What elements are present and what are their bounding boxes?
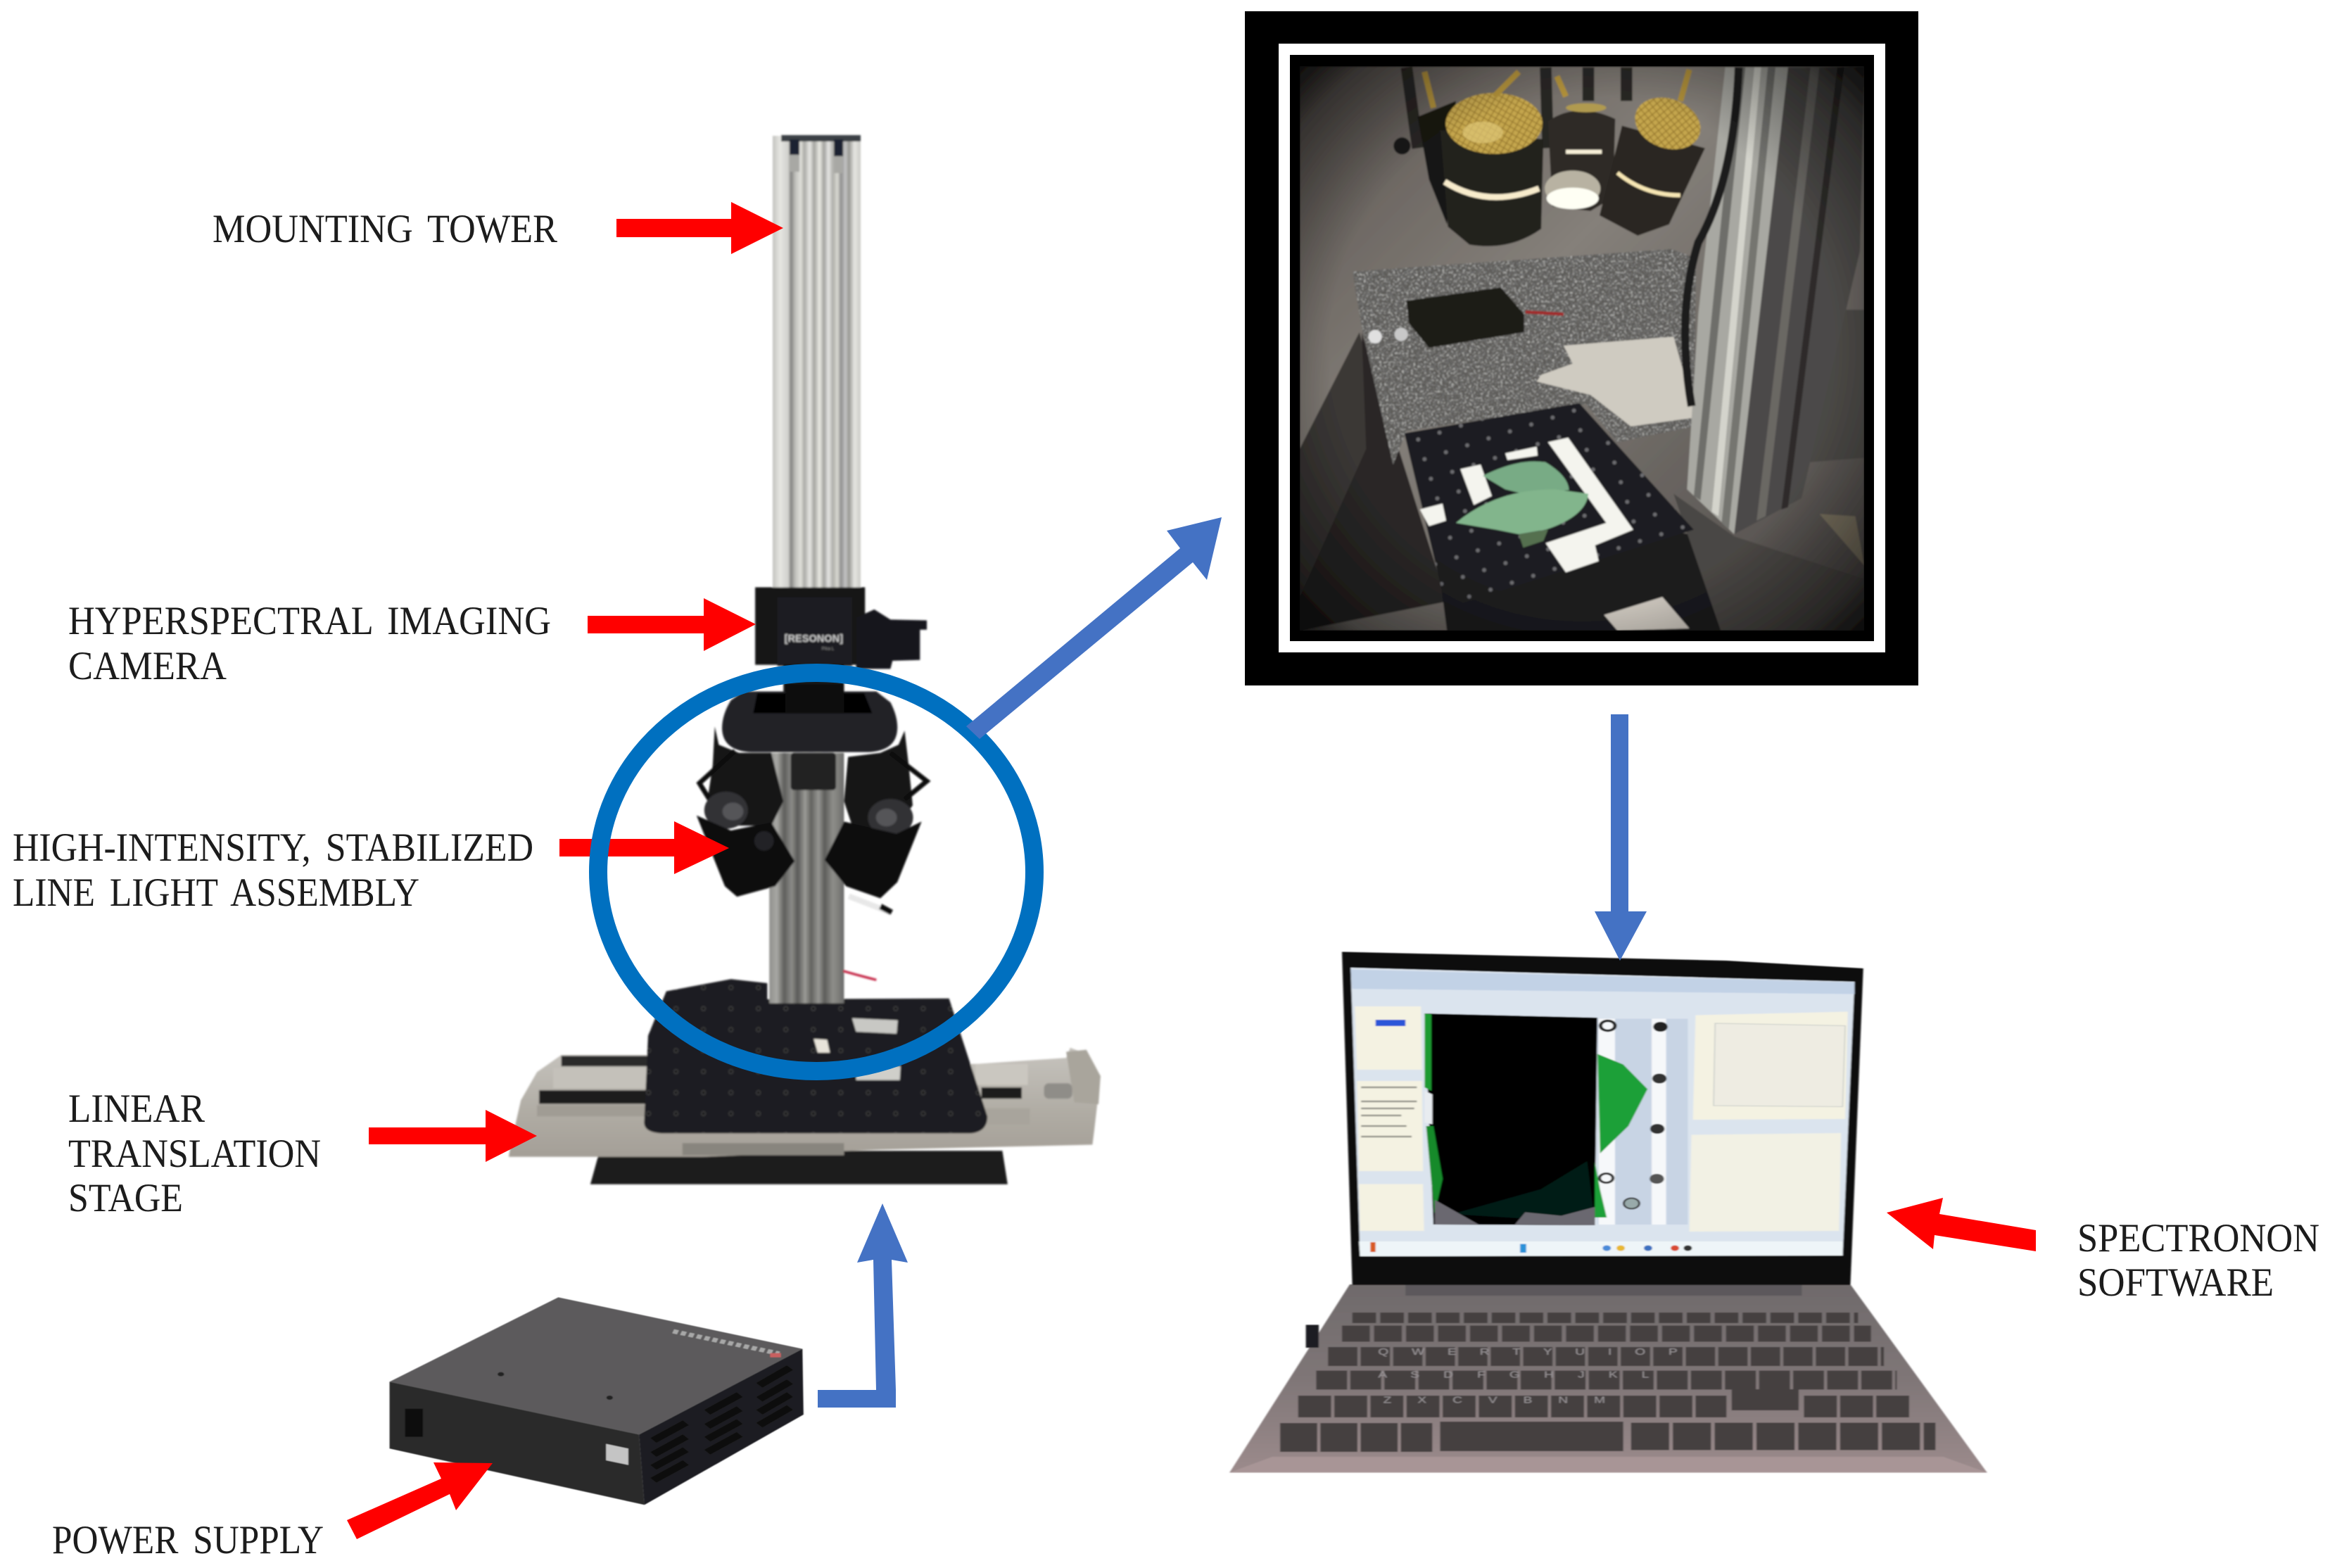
box front [390, 1382, 645, 1505]
blue arrow: to scan photo [966, 517, 1222, 739]
screen bezel [1342, 951, 1863, 1285]
label: light assembly: HIGH-INTENSITY, STABILIZED [13, 826, 533, 870]
label: camera: HYPERSPECTRAL IMAGING [68, 599, 551, 643]
lamp front [1441, 93, 1543, 246]
left lamp [697, 726, 794, 897]
software toolbar [1350, 970, 1854, 994]
key labels: A S D F G H J K L [1378, 1370, 1649, 1380]
aluminium pillar [1685, 68, 1864, 534]
vents [654, 1367, 790, 1480]
red arrow: linear stage [369, 1110, 537, 1162]
label: linear stage [68, 1087, 321, 1220]
power box in photo [1407, 287, 1524, 348]
label: light assembly: LINE LIGHT ASSEMBLY [13, 871, 419, 915]
screen [1350, 968, 1854, 1256]
box side [639, 1349, 804, 1505]
label: camera: CAMERA [68, 644, 227, 688]
label: camera [68, 599, 551, 688]
key labels: Z X C V B N M [1384, 1395, 1605, 1405]
red arrow: mounting tower [616, 202, 783, 254]
control panel [1690, 1133, 1841, 1232]
left panels [1355, 1006, 1424, 1231]
lamp right [1600, 89, 1708, 236]
laptop deck [1229, 1284, 1987, 1472]
optical plate [644, 979, 987, 1133]
mounting tower column [773, 135, 861, 593]
blue arrow: to laptop [1595, 714, 1647, 961]
vignette [1300, 66, 1864, 631]
red wire [843, 971, 876, 980]
key labels: Q W E R T Y U I O P [1378, 1347, 1678, 1357]
cotton leaf [1456, 462, 1588, 548]
hyperspectral image view [1424, 1013, 1688, 1225]
floor and stage bottom [1429, 494, 1864, 631]
right lamp [825, 731, 927, 913]
gold cables [1424, 70, 1690, 108]
red arrow: power supply [347, 1462, 493, 1539]
label: software [2077, 1216, 2319, 1305]
label: power supply: POWER SUPPLY [52, 1518, 324, 1562]
blue circle: light assembly highlight [598, 673, 1034, 1071]
red arrow: camera [588, 598, 756, 651]
lens [791, 753, 836, 790]
camera body [755, 587, 927, 704]
outer black frame [1245, 11, 1918, 685]
lower column [769, 753, 844, 1004]
photo: lamps illuminating a leaf [1245, 11, 1918, 685]
white tape [1420, 438, 1633, 572]
keyboard [1280, 1317, 1935, 1437]
lamp centre [1545, 103, 1615, 211]
switch [405, 1409, 423, 1437]
red wire in photo [1526, 312, 1564, 314]
light ring [722, 684, 897, 752]
red arrow: software [1887, 1198, 2036, 1251]
photo: laptop running Spectronon [1229, 951, 1987, 1472]
label: linear stage: LINEAR [68, 1087, 205, 1131]
perforated plate [1405, 403, 1694, 604]
spectrum plot [1693, 1012, 1848, 1120]
photo: hyperspectral imaging rig [509, 135, 1101, 1184]
lamp back left [1418, 101, 1456, 225]
label: mounting tower: MOUNTING TOWER [213, 207, 557, 251]
box top [390, 1297, 802, 1434]
label: linear stage: TRANSLATION [68, 1132, 321, 1176]
camera body: Pika L [822, 646, 835, 651]
label: light assembly [13, 826, 533, 915]
inner black frame [1290, 55, 1874, 641]
label: software: SOFTWARE [2077, 1260, 2274, 1305]
taskbar [1359, 1241, 1842, 1256]
hinge [1405, 1279, 1802, 1296]
granite counter [1353, 249, 1696, 464]
brand marking [673, 1332, 779, 1353]
base under stage [590, 1151, 1008, 1184]
key labels [1378, 1347, 1678, 1405]
linear translation stage [509, 1048, 1101, 1157]
bright dots on counter [1369, 330, 1382, 343]
wall [1300, 66, 1864, 631]
red arrow: light assembly [559, 821, 729, 874]
rating label [606, 1444, 628, 1465]
papers [1537, 336, 1696, 426]
camera body: [RESONON] [785, 633, 843, 645]
white frame [1279, 44, 1885, 652]
hanging bars [1407, 68, 1626, 148]
photo: power supply box [390, 1297, 804, 1505]
label: linear stage: STAGE [68, 1176, 183, 1220]
blue arrow: power to stage [818, 1203, 908, 1408]
